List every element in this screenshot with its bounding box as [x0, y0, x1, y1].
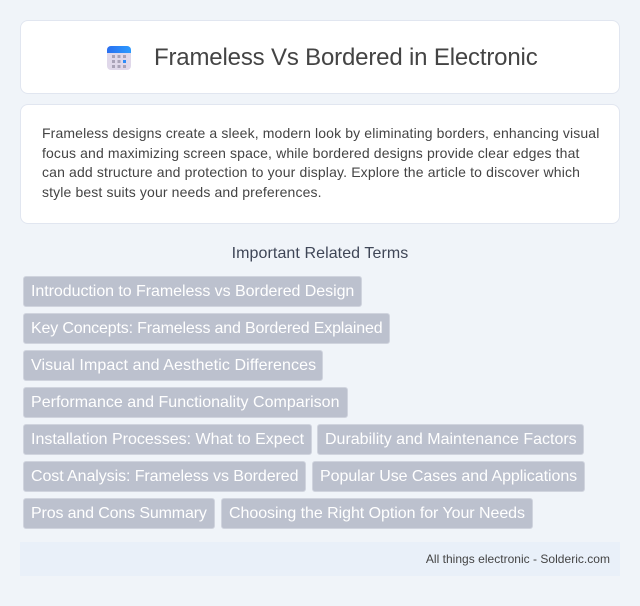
tag: Popular Use Cases and Applications: [320, 468, 577, 485]
tag: Key Concepts: Frameless and Bordered Explained: [31, 320, 382, 337]
tag: [23, 498, 215, 529]
tag: [23, 424, 312, 455]
tag: [312, 461, 585, 492]
tag: Cost Analysis: Frameless vs Bordered: [31, 468, 298, 485]
tag: [23, 461, 306, 492]
intro text: style best suits your needs and preferences.: [42, 184, 322, 200]
tag: Durability and Maintenance Factors: [325, 431, 577, 448]
footer: [20, 542, 620, 576]
tag: [317, 424, 584, 455]
tag: Performance and Functionality Comparison: [31, 394, 340, 411]
panel: title card: [20, 20, 620, 94]
tag: [23, 276, 362, 307]
tag: Installation Processes: What to Expect: [31, 431, 304, 448]
tag: [23, 350, 323, 381]
tag: [221, 498, 533, 529]
tag: Choosing the Right Option for Your Needs: [229, 505, 525, 522]
intro text: can add structure and protection to your display. Explore the article to discover which: [42, 164, 580, 180]
panel: term tags: [23, 276, 585, 529]
icon: calendar: [107, 46, 131, 70]
intro text: Frameless designs create a sleek, modern look by eliminating borders, enhancing visual: [42, 125, 599, 141]
intro text: focus and maximizing screen space, while bordered designs provide clear edges that: [42, 144, 580, 160]
footer: All things electronic - Solderic.com: [426, 552, 610, 566]
panel: intro text card: [20, 104, 620, 224]
heading: related terms: Important Related Terms: [232, 245, 408, 262]
tag: Introduction to Frameless vs Bordered Design: [31, 283, 354, 300]
tag: [23, 313, 390, 344]
tag: Visual Impact and Aesthetic Differences: [31, 357, 316, 374]
title: Frameless Vs Bordered in Electronic: [154, 44, 538, 71]
intro text: [42, 125, 599, 200]
tag: Pros and Cons Summary: [31, 505, 207, 522]
tag: [23, 387, 348, 418]
